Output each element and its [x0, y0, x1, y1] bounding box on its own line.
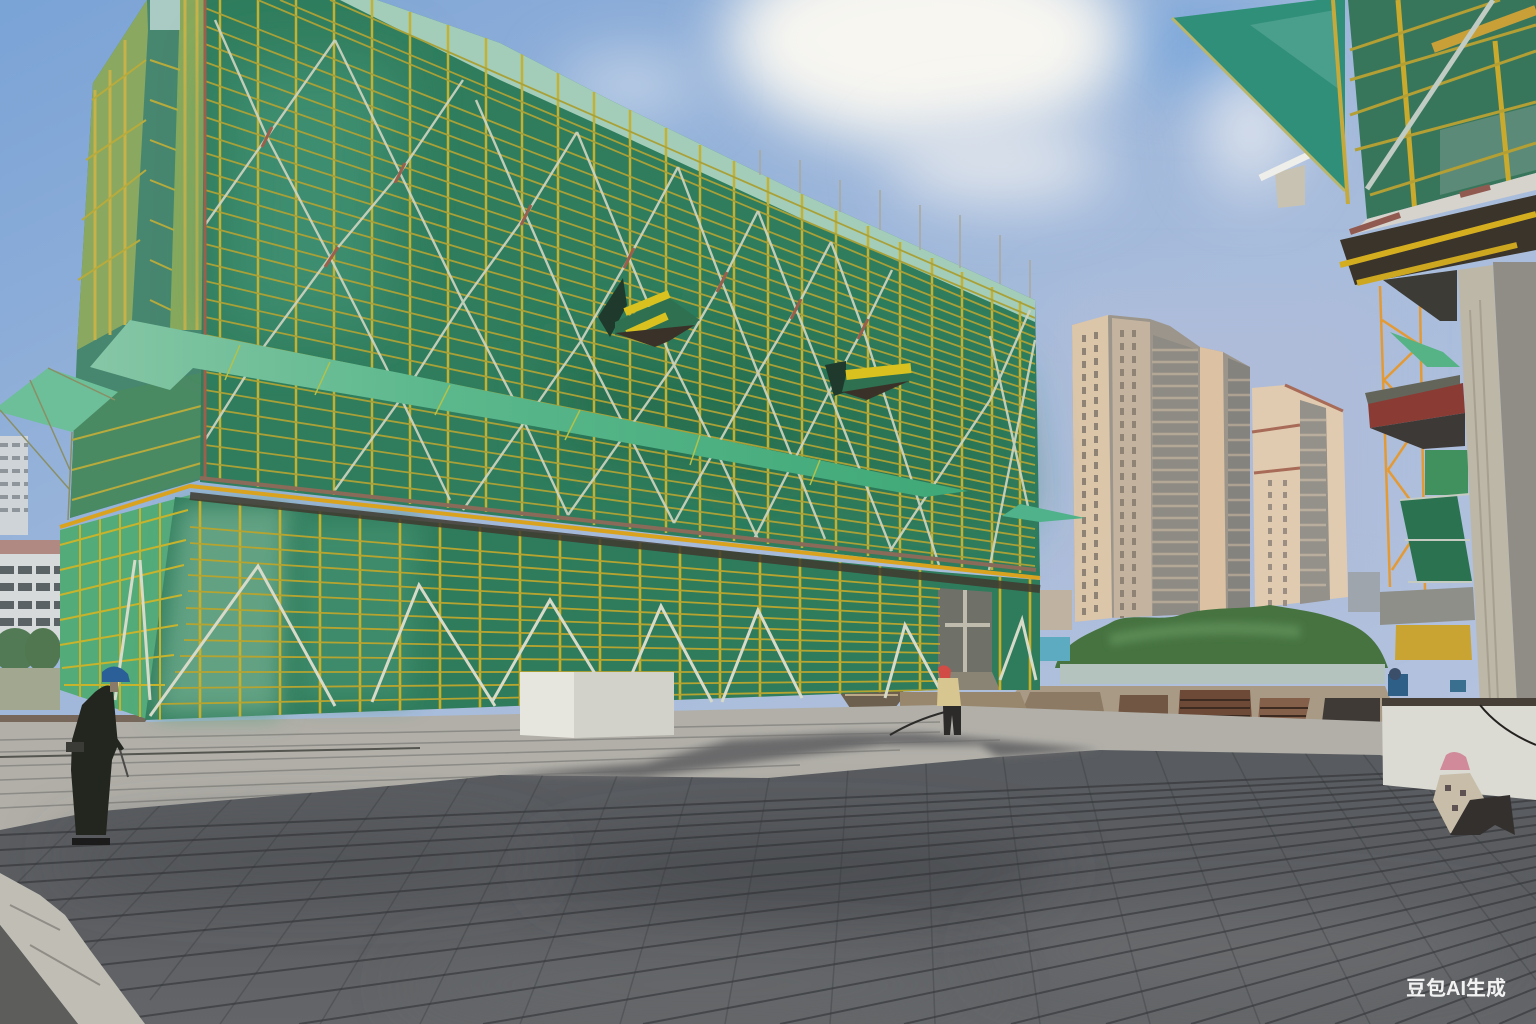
scaffold: lower verticals and horizontals: [160, 496, 1030, 719]
light green safety net band: [90, 320, 968, 497]
scaffold: lower left face: [60, 503, 188, 720]
red balcony: [1365, 375, 1465, 449]
worker: left, blue helmet: [66, 666, 130, 845]
concrete slab: [1380, 587, 1475, 625]
scaffold: upper verticals and horizontals: [205, 0, 1035, 573]
pale roof-edge strip: [340, 0, 1035, 322]
hanging platform 2: [825, 361, 911, 400]
worker: crouching right: [1433, 752, 1515, 835]
sky: [0, 0, 1536, 760]
trees: [1040, 605, 1388, 684]
tower crane jib: [1260, 153, 1313, 208]
distant buildings on the left: [0, 436, 62, 710]
rust-coloured brace joints: [205, 0, 868, 480]
right net wing: [1002, 504, 1085, 522]
upper-right structure net: [1172, 0, 1348, 204]
lower diagonal braces: [115, 560, 1036, 716]
background workers by the wall: [1388, 668, 1466, 696]
white diagonal braces: [205, 20, 1035, 570]
hanging platform 1: [598, 278, 700, 347]
residential towers: [1036, 315, 1380, 630]
white base wall: [1382, 698, 1536, 800]
upper-right yellow beams: [1340, 195, 1536, 321]
tower crane lattice: [1380, 286, 1472, 660]
white concrete block: [520, 672, 674, 738]
dark and light ground patches: [60, 830, 1510, 1011]
thin shadow patch crossing the lit area: [500, 733, 1100, 778]
building lower front face: [145, 497, 1040, 720]
lumber stacks and debris: [838, 668, 1400, 728]
ground lit: [0, 705, 1390, 830]
concrete column: [1458, 262, 1536, 704]
worker: middle: [890, 665, 961, 735]
ground shadow: [0, 750, 1536, 1024]
building upper front face: [200, 0, 1040, 577]
yellow ledge and dark under-beam: [60, 478, 1040, 589]
pavement edge at lower left: [0, 715, 150, 1024]
facade tone variation: [220, 60, 1020, 520]
roof spikes: [760, 150, 1030, 298]
pavement tile lines: [0, 735, 1536, 1024]
upper-right scaffold: [1348, 0, 1536, 235]
ground floor opening: [938, 588, 1000, 690]
building lower left side face: [60, 495, 190, 720]
building upper left side face: [70, 0, 212, 518]
left net wing: [0, 368, 118, 520]
watermark: 豆包AI生成: [1406, 976, 1506, 1000]
far right green net behind: [1390, 332, 1472, 582]
clouds: [560, 0, 1295, 205]
